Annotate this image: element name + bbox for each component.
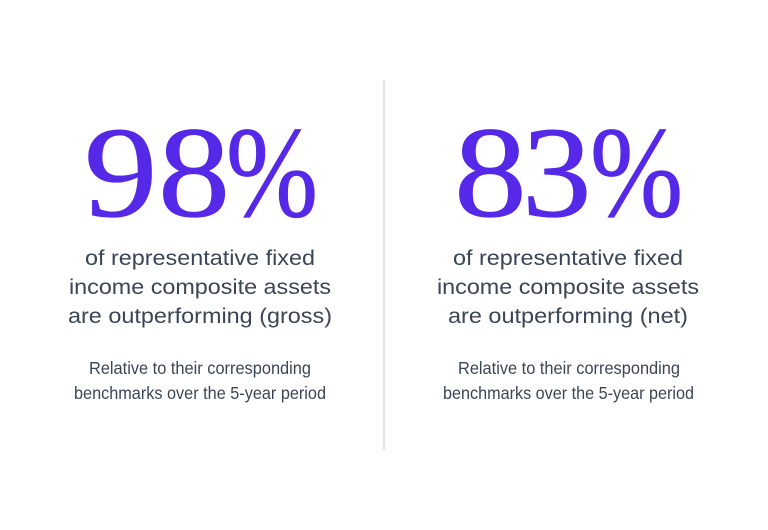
big number 98%: 9 [84,101,157,245]
description: gross: income composite assets [69,275,331,299]
description: gross [68,246,332,328]
divider line [383,80,385,450]
note: gross: benchmarks over the 5-year period [74,383,326,403]
big number 83% [454,100,683,245]
big number 98%: % [226,101,318,245]
note: net: benchmarks over the 5-year period [443,383,694,403]
panel: net [437,100,699,403]
description: gross: of representative fixed [85,246,315,270]
description: net: of representative fixed [453,246,683,270]
big number 83%: 3 [522,101,592,245]
note: gross: Relative to their corresponding [89,358,311,378]
big number 83%: % [590,101,683,245]
panel: gross [68,101,332,403]
description: net: are outperforming (net) [448,304,688,328]
note: gross [74,358,326,403]
note: net: Relative to their corresponding [458,358,680,378]
big number 83%: 8 [454,100,527,244]
description: net [437,246,699,328]
big number 98%: 8 [158,101,230,244]
big number 98% [84,101,318,245]
note: net [443,358,694,403]
description: net: income composite assets [437,275,699,299]
description: gross: are outperforming (gross) [68,304,332,328]
